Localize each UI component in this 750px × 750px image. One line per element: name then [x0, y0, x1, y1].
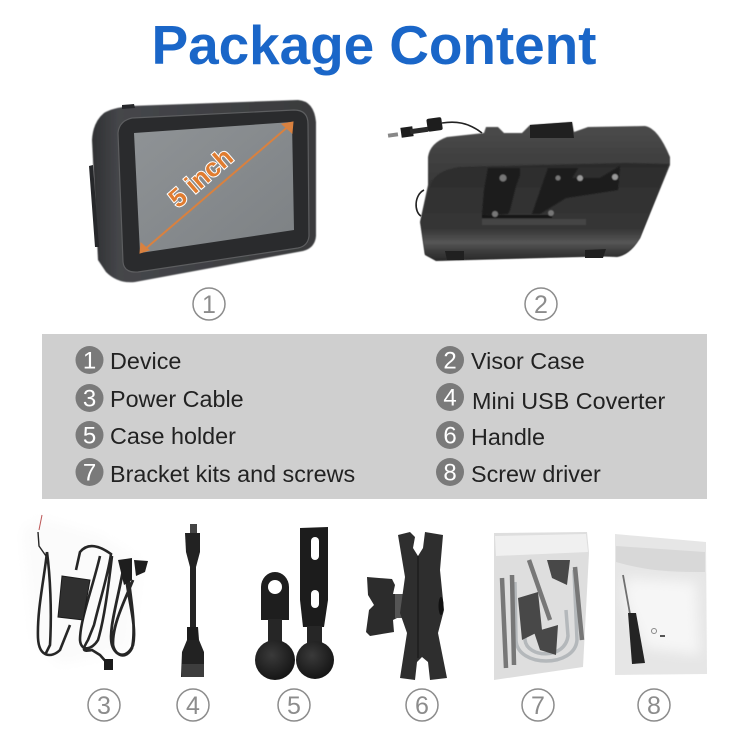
- number 2: 2: [534, 291, 548, 319]
- product: handle: [366, 532, 447, 680]
- USB socket: [181, 640, 204, 677]
- item 8: 8: [443, 460, 457, 486]
- item 3: 3: [83, 386, 96, 412]
- driver shaft: [623, 575, 630, 614]
- number 3: [88, 689, 120, 721]
- item 7: Bracket kits and screws: [110, 461, 355, 487]
- item 4: 4: [443, 384, 457, 412]
- case shell: [420, 122, 670, 261]
- bolts: [502, 560, 582, 668]
- arm: [398, 532, 447, 680]
- item 7: 7: [83, 460, 96, 486]
- plastic bag: [494, 532, 589, 680]
- bag grey band: [616, 546, 705, 572]
- number 2: [525, 288, 557, 320]
- U-bolt: [515, 570, 577, 661]
- product: device with 5 inch screen: [89, 100, 316, 282]
- size label: 5 inch: [162, 141, 239, 213]
- number 1: [193, 288, 225, 320]
- device side button: [89, 104, 135, 247]
- right cable loop: [76, 546, 112, 664]
- item 6: [436, 421, 545, 450]
- bag reflections: [624, 578, 700, 655]
- power lead: [388, 117, 482, 216]
- number 6: [406, 689, 438, 721]
- number 7: [522, 689, 554, 721]
- bare wire tip: [39, 515, 42, 530]
- number 5: [278, 689, 310, 721]
- plug body: [185, 533, 200, 567]
- item 3: Power Cable: [110, 386, 244, 412]
- short cable: [190, 566, 196, 628]
- item 1: 1: [83, 348, 96, 374]
- item 2: Visor Case: [471, 348, 585, 374]
- item 5: Case holder: [110, 423, 236, 449]
- item 2: [436, 346, 585, 374]
- thin lead: [38, 532, 46, 556]
- number 4: [177, 689, 209, 721]
- item 8: Screw driver: [471, 461, 601, 487]
- long ball mount: [296, 527, 334, 679]
- item 4: Mini USB Coverter: [472, 388, 666, 414]
- mounting plate: [482, 166, 620, 225]
- number 8: 8: [647, 692, 661, 720]
- arm seam: [417, 556, 419, 658]
- plug ends: [118, 558, 148, 585]
- background haze: [22, 518, 140, 665]
- coiled cable: [111, 565, 134, 655]
- panel: parts list: [42, 334, 707, 499]
- number 5: 5: [287, 692, 301, 720]
- number 4: 4: [186, 692, 200, 720]
- item 1: [76, 346, 181, 374]
- driver handle: [628, 613, 645, 664]
- number 8: [638, 689, 670, 721]
- panel background: [42, 334, 707, 499]
- knob shaft: [395, 594, 403, 618]
- nuts and clamps: [518, 560, 570, 655]
- item 6: Handle: [471, 424, 545, 450]
- title: Package Content: [152, 14, 596, 76]
- item 6: 6: [443, 422, 457, 450]
- short ball mount: [255, 572, 295, 680]
- product: mini USB converter: [181, 524, 204, 677]
- number 7: 7: [531, 692, 545, 720]
- arm hole: [438, 597, 444, 615]
- small screws: [652, 628, 665, 637]
- device screen: [134, 122, 294, 253]
- product: visor case: [388, 117, 670, 261]
- inverter box: [58, 576, 90, 620]
- product: case holder: [255, 527, 334, 680]
- number 6: 6: [415, 692, 429, 720]
- device front bezel: [118, 110, 309, 272]
- size arrow: [140, 122, 293, 253]
- product: power cable: [22, 515, 148, 670]
- product: bracket kits and screws bag: [494, 532, 589, 680]
- case inner recess: [421, 163, 669, 260]
- mini plug: [190, 524, 197, 534]
- inline connector: [104, 659, 113, 670]
- strain relief: [187, 627, 199, 640]
- plastic bag: [615, 534, 707, 675]
- item 5: 5: [83, 422, 96, 450]
- left cable loop: [38, 552, 70, 655]
- zip seal: [495, 534, 588, 556]
- knob: [366, 577, 397, 636]
- item 2: 2: [443, 348, 457, 374]
- number 1: 1: [202, 291, 216, 319]
- device body: [92, 100, 316, 282]
- case tabs: [530, 122, 574, 138]
- number 3: 3: [97, 692, 111, 720]
- product: screw driver bag: [615, 534, 707, 675]
- item 1: Device: [110, 348, 181, 374]
